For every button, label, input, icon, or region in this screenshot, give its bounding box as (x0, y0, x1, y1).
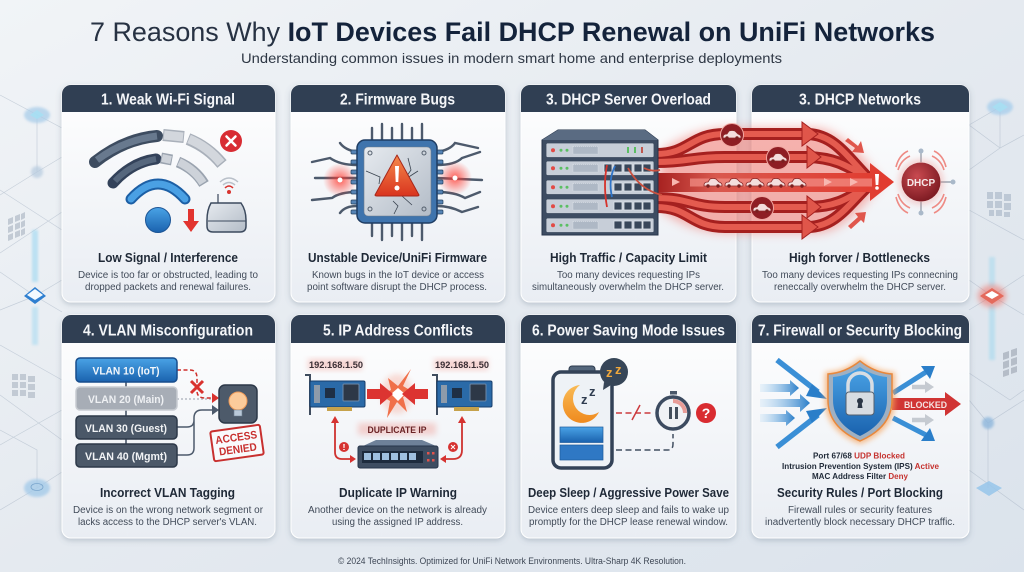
VLAN 10 button (76, 358, 177, 382)
stream arrowheads (802, 122, 821, 239)
subheading: Unstable Device/UniFi Firmware (308, 251, 487, 265)
stamp: access denied: ACCESS (215, 429, 258, 447)
VLAN 20 button (76, 387, 177, 410)
description: Firewall rules or security features (788, 505, 932, 516)
icon: incoming blue arrows (760, 360, 827, 447)
rule list: Intrusion Prevention System (IPS) Active (782, 461, 939, 471)
panel: 1 weak wi-fi signal (62, 85, 275, 302)
subheading: Deep Sleep / Aggressive Power Save (528, 486, 729, 500)
description: Too many devices requesting IPs connecning (762, 270, 958, 281)
decorative node: top left (24, 107, 50, 178)
VLAN 30 button (76, 416, 177, 439)
decorative grid icons left (8, 212, 35, 398)
rule list: Port 67/68 UDP Blocked (813, 450, 905, 460)
callout: duplicate IP (358, 423, 436, 435)
subheading: Low Signal / Interference (98, 251, 238, 265)
icon: router with weak signal (207, 178, 246, 232)
description: Too many devices requesting IPs (557, 270, 700, 281)
heading: 1. Weak Wi-Fi Signal (101, 92, 235, 108)
VLAN 20 button: VLAN 20 (Main) (88, 394, 164, 406)
icon: outgoing arrows (893, 366, 935, 441)
dashed links (616, 405, 673, 450)
icon: broken wires (312, 124, 482, 240)
IP labels: 192.168.1.50 (435, 360, 489, 371)
arrows to switch (335, 421, 462, 459)
description: inadvertently block necessary DHCP traffic. (765, 517, 955, 528)
traffic streams (656, 134, 868, 227)
panel: 7 firewall or security blocking (752, 315, 969, 538)
rule list (782, 450, 939, 481)
VLAN 10 button: VLAN 10 (IoT) (92, 366, 160, 378)
stamp: access denied: DENIED (218, 441, 258, 459)
heading: 3. DHCP Server Overload (546, 92, 711, 108)
VLAN 30 button: VLAN 30 (Guest) (85, 423, 167, 435)
connector lines (126, 370, 217, 455)
icon: sleep speech bubble (600, 358, 628, 390)
red glow (660, 128, 882, 233)
icon: sleeping battery: z (589, 384, 596, 399)
panel: 4 vlan misconfiguration (62, 315, 275, 538)
icon: smart bulb (219, 385, 257, 423)
icon: sleeping battery (553, 366, 612, 468)
icon: server rack (542, 130, 662, 235)
icon: broken wi-fi signal (95, 135, 222, 199)
subheading: Duplicate IP Warning (339, 486, 457, 500)
description: simultaneously overwhelm the DHCP server. (532, 282, 724, 293)
icon: down arrow (183, 209, 199, 232)
decorative node: bottom left (24, 479, 50, 497)
panel: 3 dhcp server overload (521, 85, 736, 302)
description: lacks access to the DHCP server's VLAN. (78, 517, 257, 528)
icon: blocked arrow: BLOCKED (904, 400, 947, 411)
subheading: Incorrect VLAN Tagging (100, 486, 235, 500)
VLAN 40 button (76, 444, 177, 467)
heading: 7. Firewall or Security Blocking (758, 322, 962, 340)
arrowheads (191, 381, 219, 415)
panel: 5 ip address conflicts (291, 315, 505, 538)
subheading: Security Rules / Port Blocking (777, 486, 943, 500)
IP labels (308, 359, 489, 371)
subheading: High Traffic / Capacity Limit (550, 251, 708, 265)
heading: 2. Firmware Bugs (340, 92, 455, 108)
description: Device is on the wrong network segment or (73, 505, 264, 516)
description: Known bugs in the IoT device or access (312, 270, 484, 281)
description: Another device on the network is already (308, 505, 487, 516)
heading: 3. DHCP Networks (799, 92, 921, 108)
rule list: MAC Address Filter Deny (812, 471, 908, 481)
description: reneccally overwhelm the DHCP server. (774, 282, 946, 293)
icon: DHCP server node: DHCP (907, 178, 935, 189)
footer: © 2024 TechInsights. Optimized for UniFi Network Environments. Ultra-Sharp 4K Resolution. (338, 556, 686, 566)
icons: inward arrows (845, 138, 866, 229)
heading: 4. VLAN Misconfiguration (83, 322, 253, 340)
description: promptly for the DHCP lease renewal window. (529, 517, 728, 528)
icon: sleeping battery: z (581, 392, 588, 407)
title: 7 Reasons Why IoT Devices Fail DHCP Renewal on UniFi Networks (90, 17, 935, 47)
arrowheads and alert badges (331, 416, 466, 463)
icon: question badge (696, 403, 716, 423)
VLAN 40 button: VLAN 40 (Mgmt) (85, 451, 167, 463)
icons: cars in band (704, 178, 806, 188)
chart: traffic flow from server to DHCP (542, 122, 956, 239)
icon: network switch (358, 440, 438, 468)
panel: 3 dhcp networks (752, 85, 969, 302)
icons: car badges (720, 124, 790, 220)
subheading: High forver / Bottlenecks (789, 251, 930, 265)
icon: DHCP server node (896, 148, 956, 216)
icon: sleep speech bubble: z (606, 365, 613, 380)
callout: duplicate IP: DUPLICATE IP (368, 425, 426, 435)
icon: sleep speech bubble: z (615, 362, 622, 377)
heading: 6. Power Saving Mode Issues (532, 322, 725, 340)
description: using the assigned IP address. (332, 517, 463, 528)
icon: cracked chip (351, 140, 443, 223)
icon: blocked arrow (892, 392, 961, 416)
subtitle: Understanding common issues in modern smart home and enterprise deployments (241, 50, 782, 66)
heading: 5. IP Address Conflicts (323, 322, 473, 340)
red sparks (323, 161, 472, 197)
icon: security shield with padlock (825, 358, 895, 444)
panel: 6 power saving mode issues (521, 315, 736, 538)
decorative nodes right (976, 99, 1017, 496)
icon: network card right (432, 375, 492, 415)
icon: network card left (305, 375, 365, 415)
description: dropped packets and renewal failures. (85, 282, 251, 293)
decorative node: glowing left (24, 230, 46, 345)
icon: paused stopwatch (657, 391, 689, 429)
description: Device enters deep sleep and fails to wake up (528, 505, 729, 516)
icon: wi-fi dot (146, 208, 170, 232)
icon: question badge: ? (702, 405, 710, 421)
description: point software disrupt the DHCP process. (307, 282, 487, 293)
icon: collision burst (367, 369, 428, 418)
background circuit lines left (0, 95, 1024, 510)
icon: error badge (220, 130, 242, 152)
panel: 2 firmware bugs (291, 85, 505, 302)
central band and arrow (656, 163, 894, 201)
IP labels: 192.168.1.50 (309, 360, 363, 371)
description: Device is too far or obstructed, leading to (78, 270, 258, 281)
stamp: access denied (210, 425, 264, 461)
